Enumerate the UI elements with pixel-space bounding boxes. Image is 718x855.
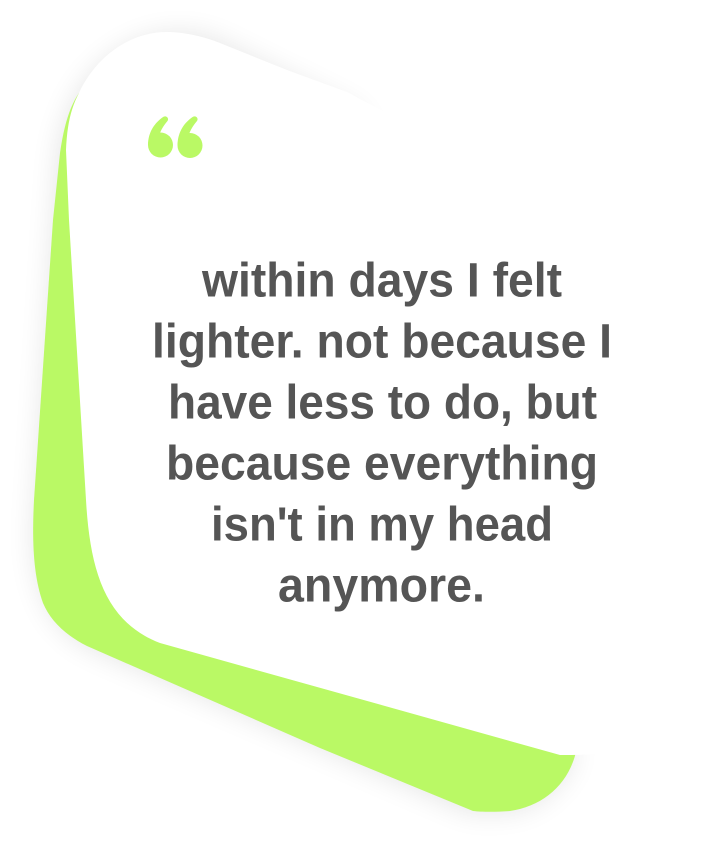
quote text: lighter. not because I <box>152 314 612 368</box>
quote text <box>152 254 612 612</box>
green backing shape <box>33 93 576 812</box>
white card face <box>66 32 699 755</box>
quote text: because everything <box>166 436 598 490</box>
card shadow <box>34 34 575 812</box>
quote text: anymore. <box>278 558 485 612</box>
quote text: isn't in my head <box>211 498 553 552</box>
quote text: within days I felt <box>201 254 562 308</box>
icon: quotation mark <box>148 116 202 158</box>
quote text: have less to do, but <box>168 376 597 430</box>
